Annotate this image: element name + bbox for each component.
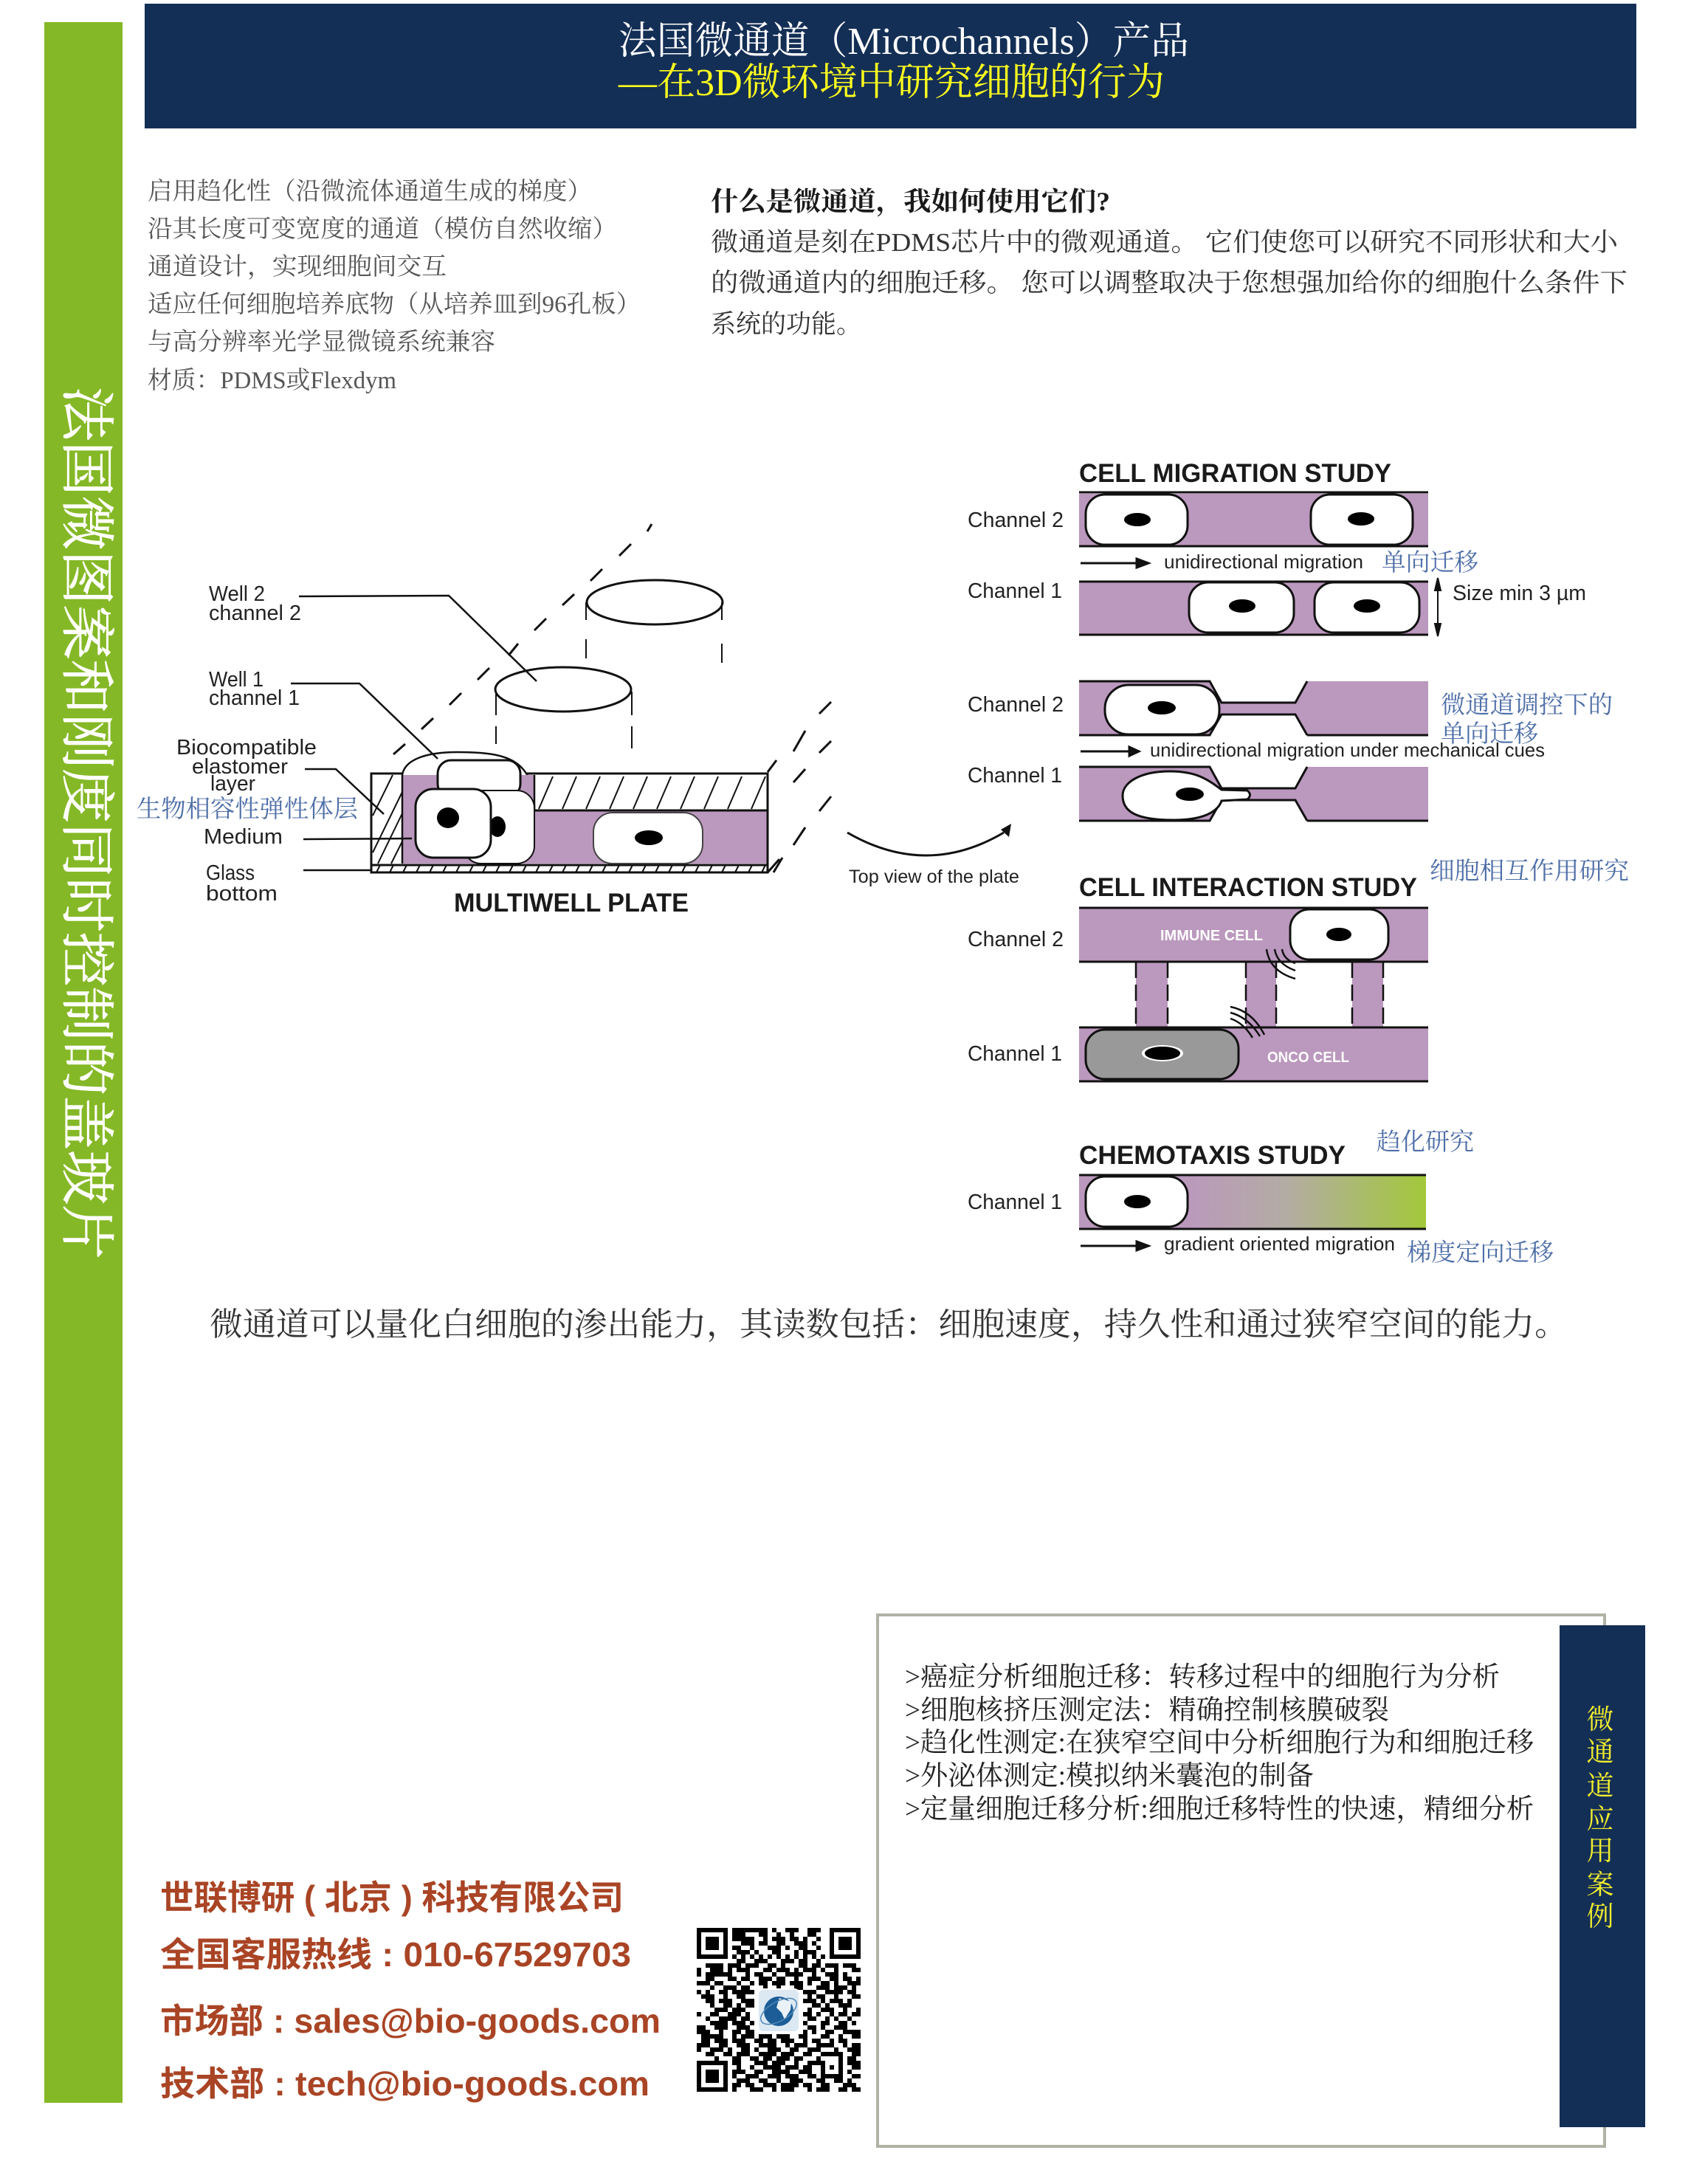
text block: readouts sentence: 微通道可以量化白细胞的渗出能力，其读数包括：细胞速度，持久性和通过狭窄空间的能力。 — [210, 1306, 1568, 1343]
panel: chemotaxis study: Channel 1 — [968, 1191, 1062, 1214]
panel: cell migration study: Channel 2 — [968, 509, 1064, 532]
leader lines — [291, 596, 537, 870]
text block: features list — [148, 178, 641, 394]
panel: green side bar with vertical title — [44, 22, 123, 2103]
text block: what are microchannels: 的微通道内的细胞迁移。 您可以调整取决于您想强加给你的细胞什么条件下 — [711, 269, 1627, 297]
channel 1 bar: ONCO CELL — [1267, 1050, 1349, 1066]
text block: contact details: 世联博研 ( 北京 ) 科技有限公司 — [160, 1878, 624, 1917]
arrow: unidirectional migration — [1081, 559, 1148, 568]
text block: contact details: 全国客服热线 : 010-67529703 — [160, 1935, 631, 1974]
application list: >趋化性测定:在狭窄空间中分析细胞行为和细胞迁移 — [905, 1727, 1534, 1758]
panel: migration under mechanical cues: Channel 1 — [968, 764, 1062, 788]
plate labels: elastomer — [192, 755, 288, 779]
application list — [905, 1661, 1534, 1825]
icon: globe logo — [757, 1989, 801, 2032]
arrow: gradient migration — [1081, 1241, 1148, 1250]
channel 2 bar — [1079, 492, 1428, 546]
chinese label: elastomer layer: 生物相容性弹性体层 — [137, 796, 358, 823]
signal waves — [1230, 949, 1295, 1038]
arrow: top view of the plate — [847, 824, 1019, 887]
text block: features list: 适应任何细胞培养底物（从培养皿到96孔板） — [148, 291, 641, 318]
text block: what are microchannels — [711, 187, 1627, 339]
text block: features list: 沿其长度可变宽度的通道（模仿自然收缩） — [148, 216, 617, 243]
arrow: top view of the plate: Top view of the plate — [849, 867, 1019, 887]
panel: cell migration study: Size min 3 µm — [1453, 582, 1586, 605]
plate frame — [371, 774, 768, 872]
application list: >外泌体测定:模拟纳米囊泡的制备 — [905, 1760, 1314, 1791]
plate labels: Medium — [204, 825, 283, 849]
channel 1 constricted — [1079, 767, 1428, 821]
panel: chemotaxis study: 梯度定向迁移 — [1407, 1239, 1554, 1267]
icon: QR code — [697, 1928, 861, 2092]
plate labels: bottom — [206, 882, 278, 906]
diagram: multiwell plate — [137, 524, 831, 917]
text block: features list: 启用趋化性（沿微流体通道生成的梯度） — [148, 178, 592, 205]
size arrow — [1435, 578, 1441, 636]
panel: application cases — [878, 1615, 1645, 2146]
side tab vertical text: 案 — [1587, 1870, 1613, 1901]
plate hatching — [373, 775, 765, 864]
panel: header banner — [145, 4, 1636, 128]
text block: contact details: 市场部 : sales@bio-goods.com — [160, 2002, 661, 2040]
panel: cell migration study: 单向迁移 — [1382, 549, 1478, 576]
side tab vertical text: 例 — [1587, 1902, 1613, 1932]
plate labels: Well 2 — [209, 582, 265, 606]
side tab vertical text: 应 — [1587, 1804, 1613, 1835]
application list: >细胞核挤压测定法：精确控制核膜破裂 — [905, 1695, 1389, 1726]
plate labels: Glass — [206, 861, 255, 885]
text block: what are microchannels: 系统的功能。 — [711, 310, 861, 339]
panel: migration under mechanical cues: 单向迁移 — [1441, 720, 1538, 748]
panel: cell interaction study: Channel 1 — [968, 1042, 1062, 1066]
panel: chemotaxis study: gradient oriented migration — [1164, 1233, 1395, 1255]
panel: chemotaxis study — [968, 1129, 1554, 1267]
panel: migration under mechanical cues: Channel 2 — [968, 693, 1064, 717]
chinese heading: 细胞相互作用研究 — [1430, 858, 1629, 885]
side tab vertical text: 通 — [1587, 1737, 1613, 1768]
panel: migration under mechanical cues: unidirectional migration under mechanical cues — [1150, 739, 1545, 761]
heading: CELL MIGRATION STUDY — [1079, 459, 1391, 488]
channel 2 bar: IMMUNE CELL — [1160, 928, 1263, 944]
panel: migration under mechanical cues — [968, 681, 1613, 821]
heading: CELL INTERACTION STUDY — [1079, 873, 1417, 902]
application list: >癌症分析细胞迁移：转移过程中的细胞行为分析 — [905, 1661, 1500, 1692]
side tab vertical text: 用 — [1587, 1836, 1613, 1867]
panel: cell interaction study — [968, 858, 1629, 1081]
dome — [402, 752, 534, 810]
chinese label: 微通道调控下的 — [1441, 692, 1613, 719]
channel 2 constricted — [1079, 681, 1428, 735]
side tab vertical text — [1587, 1704, 1613, 1932]
title line 1: 法国微通道（Microchannels）产品 — [619, 21, 1189, 63]
medium — [402, 775, 768, 864]
text block: features list: 与高分辨率光学显微镜系统兼容 — [148, 328, 495, 356]
panel: cell migration study: Channel 1 — [968, 579, 1062, 603]
plate labels — [176, 582, 317, 906]
vertical title: 法国微图案和刚度同时控制的盖玻片 — [55, 387, 116, 1259]
heading: CHEMOTAXIS STUDY — [1079, 1141, 1346, 1170]
side tab vertical text: 道 — [1587, 1771, 1613, 1802]
title line 2: —在3D微环境中研究细胞的行为 — [618, 62, 1165, 104]
side tab — [1560, 1625, 1645, 2127]
plate labels: channel 2 — [209, 602, 301, 625]
panel: cell migration study: unidirectional migration — [1164, 551, 1363, 573]
arrow: mechanical cues — [1081, 747, 1139, 756]
panel: cell interaction study: Channel 2 — [968, 928, 1064, 951]
plate labels: Biocompatible — [176, 736, 317, 759]
side tab vertical text: 微 — [1587, 1704, 1613, 1735]
text block: contact details — [160, 1878, 661, 2103]
plate labels: channel 1 — [209, 686, 300, 710]
text block: contact details: 技术部 : tech@bio-goods.com — [160, 2064, 650, 2103]
channel 1 bar — [1079, 581, 1428, 635]
connecting channels — [1136, 962, 1383, 1028]
panel: cell migration study — [968, 459, 1586, 636]
well outlines — [393, 524, 831, 872]
application list: >定量细胞迁移分析:细胞迁移特性的快速，精细分析 — [905, 1794, 1534, 1825]
cells — [438, 760, 520, 797]
plate labels: Well 1 — [209, 668, 263, 692]
plate caption: MULTIWELL PLATE — [454, 889, 689, 917]
text block: features list: 材质：PDMS或Flexdym — [148, 367, 396, 394]
text block: what are microchannels: 微通道是刻在PDMS芯片中的微观通道。 它们使您可以研究不同形状和大小 — [711, 228, 1619, 257]
channel 1 bar — [1079, 1027, 1428, 1081]
text block: features list: 通道设计，实现细胞间交互 — [148, 253, 447, 280]
question heading: 什么是微通道，我如何使用它们? — [711, 187, 1110, 217]
channel 2 bar — [1079, 908, 1428, 962]
plate labels: layer — [210, 772, 255, 796]
gradient channel — [1079, 1175, 1426, 1229]
chinese heading: 趋化研究 — [1377, 1129, 1474, 1156]
